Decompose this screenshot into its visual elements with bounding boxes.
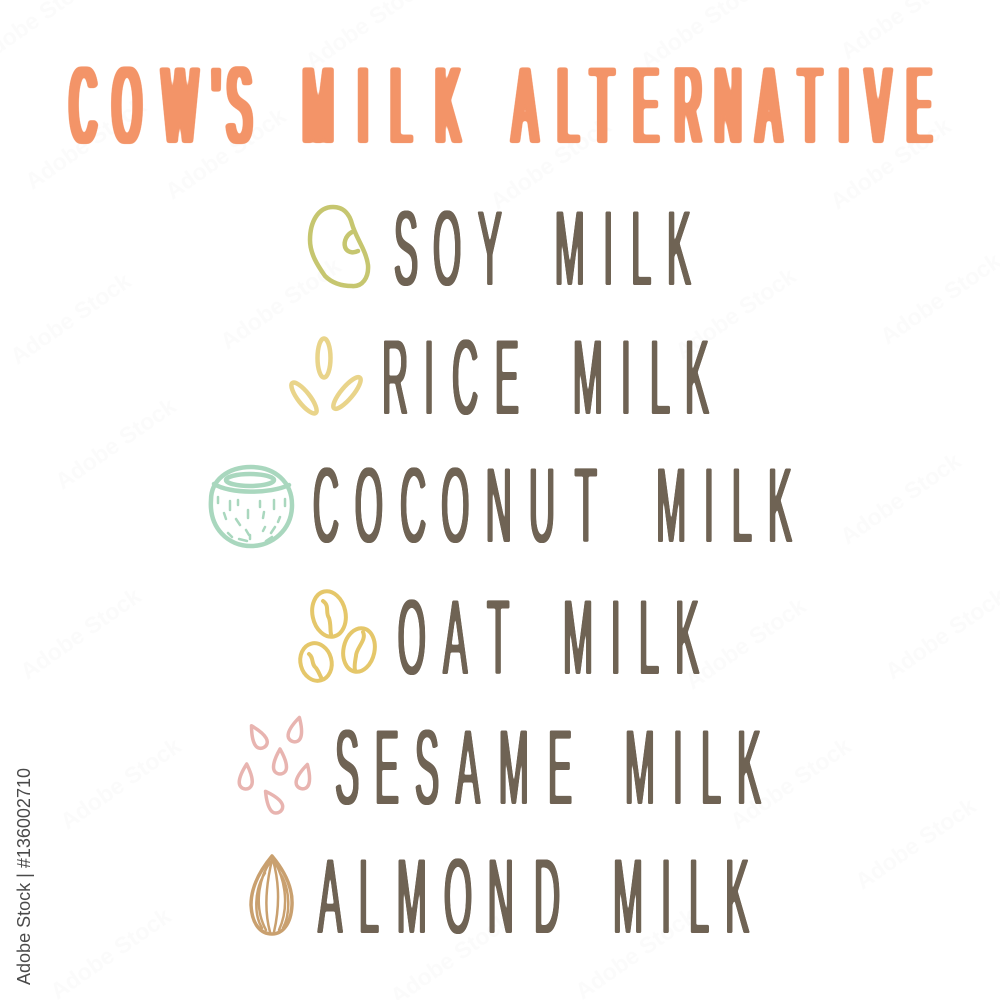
label: soy milk: SOY MILK	[394, 189, 691, 308]
watermark pattern: Adobe Stock	[680, 592, 811, 694]
title: COW'S MILK ALTERNATIVE	[70, 45, 931, 167]
icon: rice grains	[288, 338, 364, 417]
watermark pattern: Adobe Stock	[485, 112, 616, 214]
label: sesame milk: SESAME MILK	[335, 708, 761, 827]
icon: sesame seeds	[239, 716, 314, 816]
icon: coconut	[211, 467, 292, 546]
watermark pattern: Adobe Stock	[825, 112, 956, 214]
label: almond milk: ALMOND MILK	[318, 837, 749, 956]
icon: soy bean	[310, 207, 368, 286]
label: oat milk: OAT MILK	[398, 578, 699, 697]
watermark pattern: Adobe Stock	[160, 102, 291, 204]
watermark pattern: Adobe Stock	[850, 792, 981, 894]
watermark pattern: Adobe Stock	[215, 252, 346, 354]
watermark pattern: Adobe Stock	[55, 732, 186, 834]
watermark pattern: Adobe Stock	[670, 262, 801, 364]
label: coconut milk: COCONUT MILK	[313, 446, 792, 565]
watermark pattern: Adobe Stock	[5, 267, 136, 369]
label: rice milk: RICE MILK	[382, 318, 709, 437]
watermark pattern: Adobe Stock	[20, 92, 151, 194]
icon: almond	[251, 856, 292, 934]
watermark pattern: Adobe Stock	[15, 582, 146, 684]
watermark pattern: Adobe Stock	[50, 392, 181, 494]
watermark pattern: Adobe Stock	[835, 447, 966, 549]
icon: oats	[296, 588, 379, 684]
watermark pattern: Adobe Stock	[725, 732, 856, 834]
stock image id: Adobe Stock | #136002710	[14, 768, 34, 985]
